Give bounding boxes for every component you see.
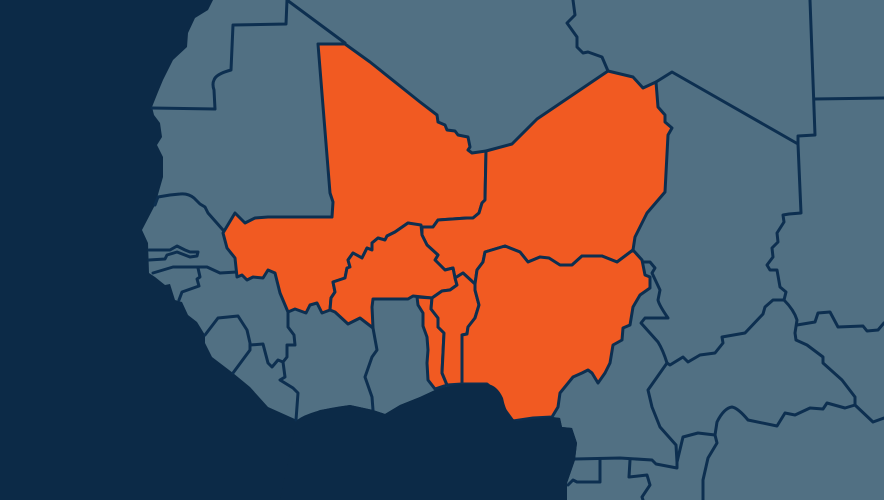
Mali — [223, 44, 486, 313]
Nigeria — [462, 246, 650, 421]
highlighted countries — [223, 44, 672, 421]
Niger — [422, 71, 672, 284]
coast overlay for southern edge of highlighted countries — [280, 384, 577, 500]
Burkina Faso — [330, 223, 457, 328]
Benin — [431, 273, 479, 385]
Togo — [417, 297, 447, 389]
